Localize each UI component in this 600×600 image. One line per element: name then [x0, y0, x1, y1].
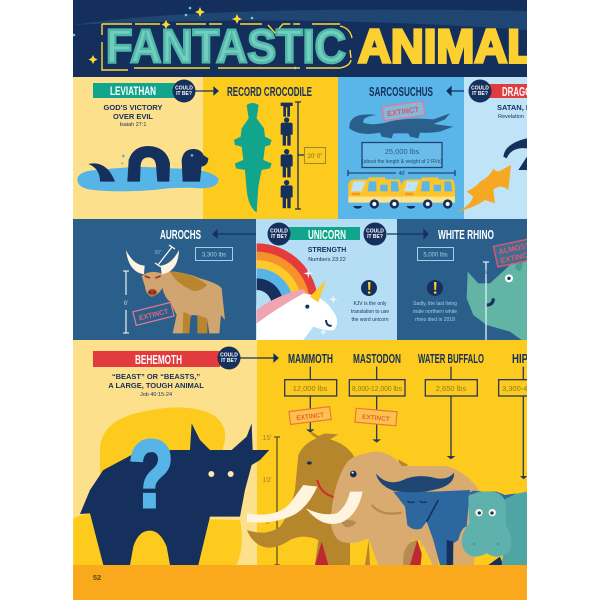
extinct stamp — [133, 302, 174, 325]
extinct stamp — [382, 101, 425, 121]
almost extinct stamp — [493, 235, 552, 267]
size box: (about the length & weight of 2 RVs) — [362, 159, 442, 165]
height scale: 15' — [262, 435, 272, 442]
icon: white rhino — [467, 260, 527, 340]
weight box: 3,300 lbs — [202, 252, 226, 258]
could it be badge: Dragon: COULD — [471, 86, 489, 92]
unicorn note: translation to use — [351, 309, 389, 315]
length ruler 40 feet — [347, 170, 456, 176]
length box — [304, 148, 326, 164]
almost extinct stamp: ALMOST — [498, 241, 531, 256]
arrow: dragon to Sarcosuchus — [447, 87, 470, 95]
icon: alert — [361, 280, 377, 296]
Behemoth reference: Job 40:15-24 — [140, 392, 172, 398]
question mark: ? — [128, 421, 174, 528]
rhino note: male northern white — [413, 309, 457, 315]
yellow background blobs — [73, 407, 242, 565]
unicorn note: the word unicorn — [352, 317, 389, 323]
icon: rainbow and unicorn — [257, 243, 338, 340]
panel: Record Crocodile — [203, 77, 338, 219]
panel: Unicorn — [256, 219, 397, 340]
height scale: 5' — [265, 519, 271, 526]
almost extinct stamp: EXTINCT — [500, 250, 533, 265]
column headings: MASTODON — [353, 351, 401, 366]
icon: dragon silhouette — [503, 138, 527, 170]
height scale: 10' — [262, 477, 272, 484]
panel: White Rhino — [397, 219, 552, 340]
could it be badge: Dragon: IT BE? — [472, 91, 488, 97]
panel: Aurochs — [73, 219, 256, 340]
icon: behemoth silhouette — [80, 423, 269, 565]
panel: Leviathan — [73, 77, 203, 219]
could it be badge: Unicorn and Rhino: IT BE? — [367, 234, 383, 240]
arrow: unicorn to aurochs — [213, 230, 268, 238]
column headings: WATER BUFFALO — [418, 351, 484, 366]
Leviathan label bar — [93, 83, 178, 98]
extinct stamp: mammoth: EXTINCT — [296, 412, 324, 422]
icon: two RVs — [348, 177, 455, 209]
could it be badge: Behemoth — [218, 346, 240, 370]
unicorn note: KJV is the only — [353, 301, 387, 307]
could it be badge: Leviathan: IT BE? — [176, 91, 192, 97]
infographic page — [73, 0, 527, 600]
Unicorn label bar — [288, 227, 360, 240]
Behemoth meaning: “BEAST” OR “BEASTS,” — [112, 372, 200, 381]
extinct stamp: EXTINCT — [387, 105, 420, 118]
title frame — [102, 24, 352, 70]
height ruler: 5' — [484, 270, 488, 276]
icon: crocodile from above — [234, 103, 272, 213]
Dragon name: DRAGON — [502, 84, 537, 99]
length ruler 40 feet: 40' — [399, 171, 405, 177]
header band — [73, 0, 527, 77]
height ruler: 6' — [124, 301, 128, 307]
weight labels: 2,650 lbs — [436, 384, 466, 393]
weight labels: 12,000 lbs — [293, 384, 328, 393]
icon: alert — [427, 280, 443, 296]
column headings — [288, 351, 542, 366]
extinct stamp: EXTINCT — [138, 308, 170, 322]
icon: stacked human figures — [281, 103, 293, 208]
arrow: unicorn to rhino — [387, 230, 428, 238]
extinct stamp: mastodon: EXTINCT — [362, 414, 390, 423]
column headings: MAMMOTH — [288, 351, 333, 366]
could it be badge: Leviathan: COULD — [175, 86, 193, 92]
weight box: 5,000 lbs — [423, 252, 448, 258]
page number: 52 — [93, 573, 101, 582]
Dragon label bar — [488, 84, 527, 98]
could it be badge: Leviathan — [172, 80, 196, 102]
weight labels: 8,000-12,000 lbs — [352, 384, 402, 393]
size box: 25,000 lbs — [385, 147, 420, 156]
Unicorn meaning: STRENGTH — [308, 247, 346, 254]
extinct stamp: mammoth — [289, 407, 331, 424]
panel: Dragon — [455, 77, 527, 219]
Behemoth name: BEHEMOTH — [135, 352, 182, 367]
weight labels — [293, 384, 554, 393]
Leviathan meaning: OVER EVIL — [113, 112, 153, 121]
icon: mammoth — [247, 432, 367, 565]
White Rhino heading: WHITE RHINO — [438, 227, 494, 242]
Leviathan name: LEVIATHAN — [110, 84, 156, 98]
rhino note: Sadly, the last living — [413, 301, 457, 307]
could it be badge: Unicorn and Rhino: COULD — [366, 228, 384, 234]
Dragon reference: Revelation — [498, 114, 524, 120]
rhino note: rhino died in 2018 — [415, 317, 455, 323]
horn length ruler — [154, 245, 175, 267]
icon: aurochs — [126, 250, 225, 333]
icon: dragon flame — [455, 165, 511, 213]
icon: water buffalo — [376, 473, 470, 565]
arrow: Leviathan to crocodile — [195, 88, 218, 94]
could it be badge: Aurochs and Unicorn: COULD — [270, 228, 288, 234]
could it be badge: Behemoth: COULD — [220, 352, 238, 358]
icon: sea monster in water — [77, 146, 218, 191]
panel: modern comparison animals — [247, 340, 554, 565]
weight box — [196, 248, 232, 260]
could it be badge: Dragon — [468, 80, 492, 102]
weight labels: 3,300-4,000 lbs — [502, 384, 554, 393]
Sarcosuchus heading: SARCOSUCHUS — [369, 84, 433, 99]
icon: sarcosuchus — [349, 113, 453, 138]
Aurochs heading: AUROCHS — [160, 227, 201, 242]
Dragon meaning: SATAN, LIAR — [497, 103, 544, 112]
Leviathan meaning: GOD'S VICTORY — [104, 103, 162, 112]
Unicorn reference: Numbers 23:22 — [308, 257, 346, 263]
height ruler — [483, 262, 489, 340]
horn length ruler: 30" — [154, 250, 162, 256]
could it be badge: Unicorn and Rhino — [364, 222, 386, 246]
height ruler — [123, 271, 129, 333]
weight box — [418, 248, 454, 260]
could it be badge: Aurochs and Unicorn — [268, 222, 290, 246]
height scale — [262, 435, 280, 565]
arrow: Behemoth to mammoth — [240, 354, 278, 362]
panel: Behemoth — [73, 340, 257, 565]
icon: mastodon — [306, 452, 480, 565]
Leviathan reference: Isaiah 27:1 — [120, 122, 146, 128]
icon: hippo — [462, 491, 527, 565]
length ruler — [295, 102, 304, 209]
extinct stamp: mastodon — [355, 408, 397, 426]
size box — [362, 142, 442, 168]
title: Animal: ANIMAL — [358, 20, 535, 72]
bottom orange band — [73, 565, 527, 600]
Behemoth label bar — [93, 351, 220, 367]
Unicorn name: UNICORN — [308, 228, 346, 242]
could it be badge: Aurochs and Unicorn: IT BE? — [271, 234, 287, 240]
length box: 20' 0" — [308, 154, 322, 160]
panel: Sarcosuchus — [338, 77, 464, 219]
Record Crocodile heading: RECORD CROCODILE — [227, 84, 312, 99]
Behemoth meaning: A LARGE, TOUGH ANIMAL — [108, 381, 204, 390]
title: Fantastic: FANTASTIC — [106, 20, 346, 72]
could it be badge: Behemoth: IT BE? — [221, 358, 237, 364]
column headings: HIPPO — [512, 351, 542, 366]
pointer lines and weight boxes — [285, 367, 552, 479]
